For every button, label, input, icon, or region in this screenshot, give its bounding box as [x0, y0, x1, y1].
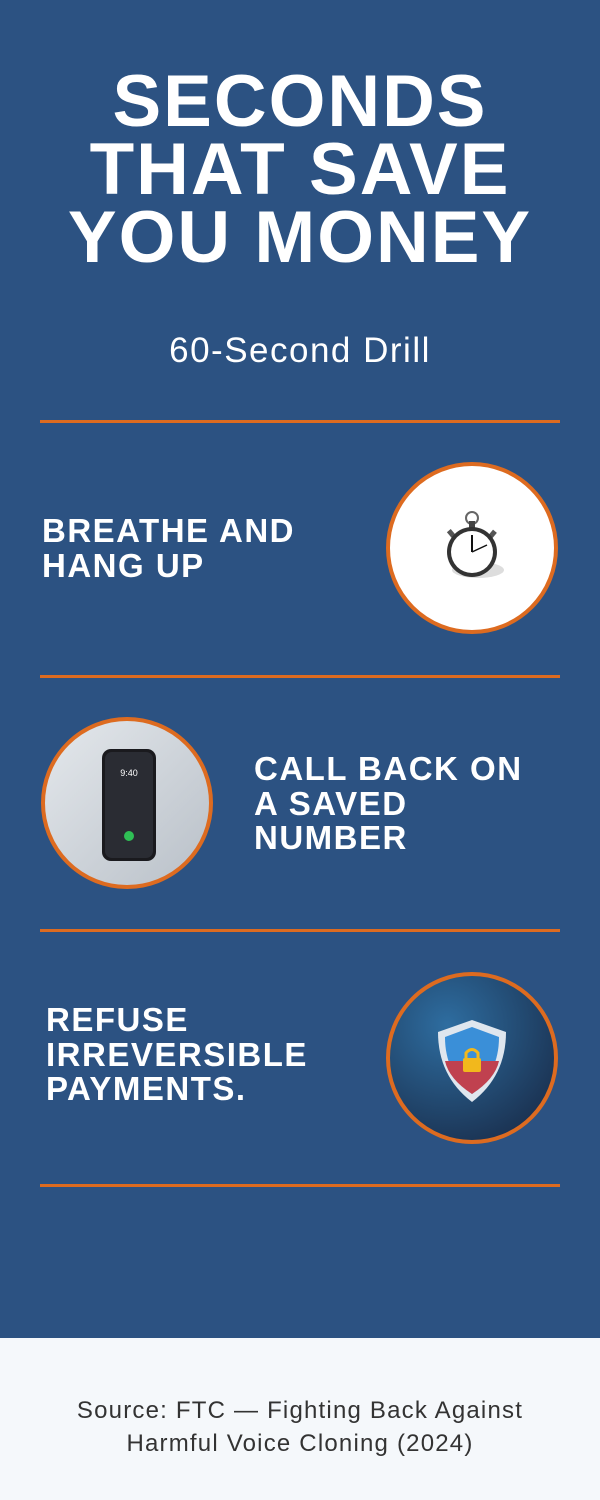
title: YOU MONEY	[68, 197, 532, 278]
icon: phone: 9:40	[120, 768, 138, 778]
step 3 text	[46, 1001, 308, 1107]
step 2 text: CALL BACK ON	[254, 750, 523, 787]
step 2 text	[254, 750, 523, 856]
step 3 text: REFUSE	[46, 1001, 189, 1038]
footer source: Source: FTC — Fighting Back Against	[77, 1397, 523, 1424]
step 1 text: HANG UP	[42, 546, 205, 584]
title	[68, 61, 532, 278]
icon: stopwatch	[386, 462, 558, 634]
step 1 text	[42, 512, 295, 584]
title: SECONDS	[112, 61, 488, 142]
step 3 text: PAYMENTS.	[46, 1070, 247, 1107]
footer source	[0, 1338, 600, 1500]
subtitle: 60-Second Drill	[169, 331, 431, 370]
step 2 text: A SAVED	[254, 784, 408, 822]
footer source: Harmful Voice Cloning (2024)	[126, 1430, 474, 1457]
step 1 text: BREATHE AND	[42, 512, 295, 549]
icon: shield	[386, 972, 558, 1144]
title: THAT SAVE	[90, 129, 510, 210]
icon: phone	[41, 717, 213, 889]
step 2 text: NUMBER	[254, 819, 408, 856]
step 3 text: IRREVERSIBLE	[46, 1036, 308, 1072]
